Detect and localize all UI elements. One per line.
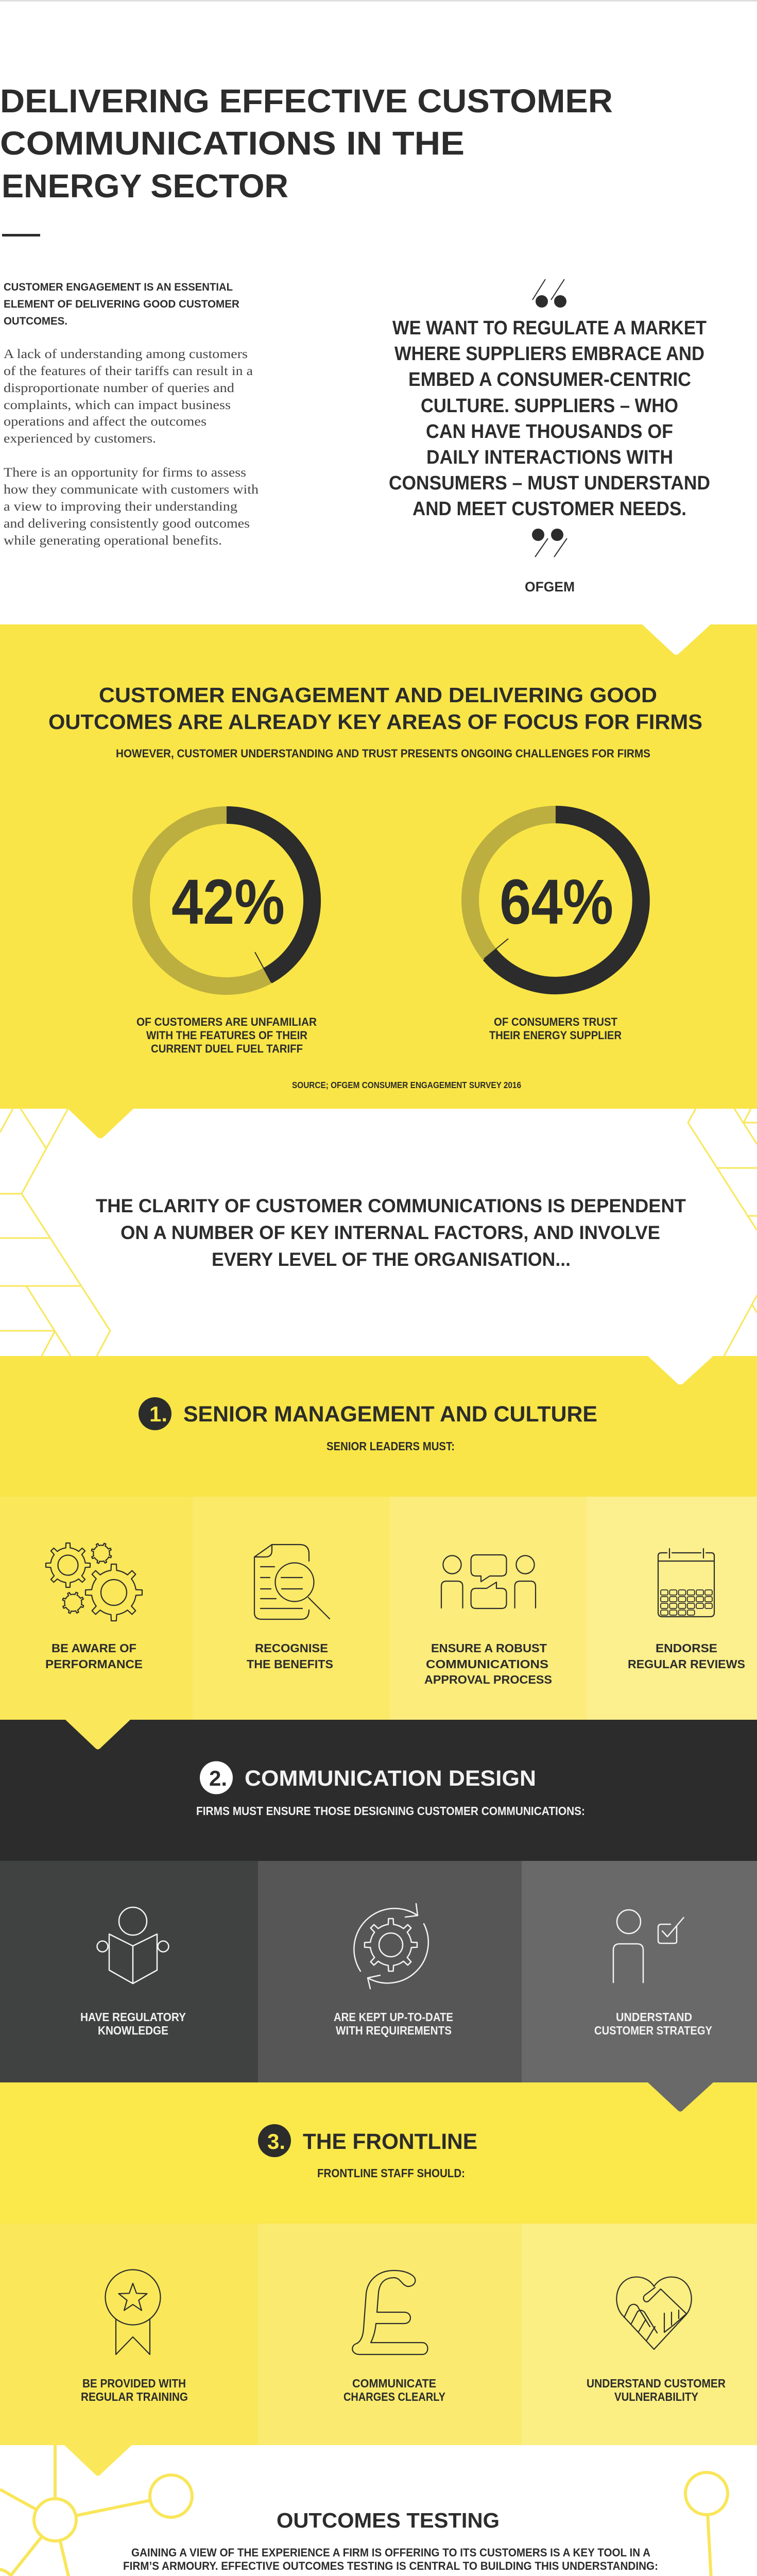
intro heading: CUSTOMER ENGAGEMENT IS AN ESSENTIAL [4,281,233,293]
tile label: RECOGNISE [255,1641,328,1655]
quote attribution: OFGEM [525,579,575,595]
tile label: ENDORSE [656,1641,717,1655]
section number badge: 3. [267,2129,285,2154]
intro paragraph one [4,347,253,446]
panel heading [48,683,702,734]
title: ENERGY SECTOR [2,167,288,205]
outcomes testing intro: GAINING A VIEW OF THE EXPERIENCE A FIRM IS OFFERING TO ITS CUSTOMERS IS A KEY TOOL IN A [131,2546,650,2559]
panel: key areas of focus [0,624,757,1139]
tile label [424,1641,552,1686]
icon: calendar [658,1549,714,1617]
tile label: UNDERSTAND CUSTOMER [587,2377,726,2390]
tile label: PERFORMANCE [45,1657,143,1671]
quote text: AND MEET CUSTOMER NEEDS. [412,498,686,520]
quote text: CONSUMERS – MUST UNDERSTAND [389,472,710,494]
intro paragraph one: complaints, which can impact business [4,398,231,412]
tile label [81,2377,188,2403]
section number badge [258,2124,291,2157]
section heading: COMMUNICATION DESIGN [245,1766,536,1791]
icon: gear with cycle arrows [354,1904,428,1989]
icon: medal [105,2270,161,2354]
intro paragraph one: experienced by customers. [4,432,156,446]
title [0,82,613,205]
icon: person reading a book [97,1907,169,1984]
intro heading: OUTCOMES. [4,315,67,327]
network background pattern [0,2445,757,2576]
intro paragraph two: how they communicate with customers with [4,483,259,497]
tile label: COMMUNICATIONS [426,1657,548,1671]
section subheading: SENIOR LEADERS MUST: [326,1439,455,1453]
caption: 64%: OF CONSUMERS TRUST [494,1015,618,1028]
panel: communication design [0,1720,757,1861]
section heading: SENIOR MANAGEMENT AND CULTURE [183,1402,597,1427]
tile: customer vulnerability [522,2224,757,2445]
quote text [389,317,710,520]
panel subheading: HOWEVER, CUSTOMER UNDERSTANDING AND TRUST PRESENTS ONGOING CHALLENGES FOR FIRMS [116,747,650,760]
icon: heart handshake [616,2277,692,2349]
caption: 64%: THEIR ENERGY SUPPLIER [489,1029,622,1042]
quote text: CAN HAVE THOUSANDS OF [426,421,673,443]
donut chart: 42% [141,815,312,986]
panel heading: OUTCOMES ARE ALREADY KEY AREAS OF FOCUS FOR FIRMS [48,710,702,734]
tile label: UNDERSTAND [616,2010,692,2024]
donut chart: 64% [470,815,641,986]
tile label: APPROVAL PROCESS [424,1673,552,1686]
intro paragraph two: while generating operational benefits. [4,534,222,548]
quote text: CULTURE. SUPPLIERS – WHO [421,395,678,417]
caption: 42%: WITH THE FEATURES OF THEIR [146,1029,307,1042]
tile: endorse regular reviews [587,1497,757,1720]
section number badge: 1. [149,1402,167,1426]
panel: the frontline [0,2082,757,2224]
tile: regular training [0,2224,258,2445]
tile label: CHARGES CLEARLY [343,2390,445,2403]
quote text: WE WANT TO REGULATE A MARKET [392,317,707,339]
section heading: THE FRONTLINE [303,2129,477,2154]
intro paragraph two: There is an opportunity for firms to assess [4,466,246,480]
tile label: CUSTOMER STRATEGY [594,2024,712,2037]
tile label: WITH REQUIREMENTS [336,2024,452,2037]
intro heading: ELEMENT OF DELIVERING GOOD CUSTOMER [4,298,239,310]
section subheading: FIRMS MUST ENSURE THOSE DESIGNING CUSTOMER COMMUNICATIONS: [196,1804,585,1818]
tile label [628,1641,745,1671]
icon: gears [46,1540,142,1621]
tile label: REGULAR TRAINING [81,2390,188,2403]
section number badge [139,1397,171,1430]
tile label: ENSURE A ROBUST [431,1641,547,1655]
title: COMMUNICATIONS IN THE [0,125,464,162]
tile: recognise the benefits [193,1497,390,1720]
tile label: KNOWLEDGE [98,2024,168,2037]
intro paragraph one: disproportionate number of queries and [4,381,235,395]
tile: be aware of performance [0,1497,193,1720]
tile label [45,1641,143,1671]
quote text: WHERE SUPPLIERS EMBRACE AND [394,343,704,365]
tile label: VULNERABILITY [614,2390,698,2403]
panel: senior management and culture [0,1356,757,1497]
tile: communicate charges clearly [258,2224,522,2445]
clarity heading: ON A NUMBER OF KEY INTERNAL FACTORS, AND INVOLVE [121,1222,660,1243]
tile label: BE PROVIDED WITH [82,2377,186,2390]
tile label: REGULAR REVIEWS [628,1657,745,1671]
donut chart: 42%: 42% [171,867,285,938]
section number badge [200,1761,233,1794]
tile label [594,2010,712,2037]
caption: 42% [136,1015,317,1055]
clarity heading [96,1195,686,1270]
tile label [587,2377,726,2403]
outcomes testing intro [123,2546,658,2572]
intro paragraph one: of the features of their tariffs can result in a [4,364,253,378]
intro paragraph one: operations and affect the outcomes [4,415,207,429]
icon: person with checkbox [613,1910,684,1982]
intro paragraph two [4,466,259,548]
pointer from frontline tile [64,2445,132,2476]
quote text: EMBED A CONSUMER-CENTRIC [408,369,691,391]
intro heading [4,281,239,327]
tile label [343,2377,445,2403]
panel heading: CUSTOMER ENGAGEMENT AND DELIVERING GOOD [99,683,657,707]
section subheading: FRONTLINE STAFF SHOULD: [317,2166,465,2180]
clarity heading: EVERY LEVEL OF THE ORGANISATION... [212,1248,571,1270]
tile label [334,2010,453,2037]
icon: opening quote mark [532,279,566,308]
clarity heading: THE CLARITY OF CUSTOMER COMMUNICATIONS IS DEPENDENT [96,1195,686,1216]
tile label: BE AWARE OF [51,1641,136,1655]
source note: SOURCE; OFGEM CONSUMER ENGAGEMENT SURVEY 2016 [292,1080,521,1090]
tile: robust approval process [390,1497,587,1720]
tile: kept up to date [258,1861,522,2082]
outcomes testing intro: FIRM’S ARMOURY. EFFECTIVE OUTCOMES TESTING IS CENTRAL TO BUILDING THIS UNDERSTANDING: [123,2560,658,2572]
tile label: THE BENEFITS [247,1657,333,1671]
caption: 64% [489,1015,622,1042]
intro paragraph two: a view to improving their understanding [4,500,238,514]
section number badge: 2. [209,1766,227,1790]
caption: 42%: OF CUSTOMERS ARE UNFAMILIAR [136,1015,317,1028]
quote text: DAILY INTERACTIONS WITH [426,447,673,468]
outcomes testing heading: OUTCOMES TESTING [277,2509,500,2532]
hexagon background pattern [0,1109,757,1356]
intro text block [4,281,259,548]
pointer from tile row [648,2082,713,2111]
intro paragraph one: A lack of understanding among customers [4,347,248,361]
icon: closing quote mark [532,529,567,557]
icon: document and magnifier [254,1545,330,1619]
tile label: ARE KEPT UP-TO-DATE [334,2010,453,2024]
quote [389,279,710,595]
icon: pound sign [352,2270,427,2354]
title: DELIVERING EFFECTIVE CUSTOMER [0,82,613,120]
icon: two people conversing [441,1555,536,1608]
pointer from tile row [65,1720,130,1750]
tile: regulatory knowledge [0,1861,258,2082]
tile label [80,2010,186,2037]
intro paragraph two: and delivering consistently good outcomes [4,517,250,531]
tile label: COMMUNICATE [352,2377,436,2390]
tile label [247,1641,333,1671]
caption: 42%: CURRENT DUEL FUEL TARIFF [151,1042,303,1055]
donut chart: 64%: 64% [500,867,613,938]
tile: understand customer strategy [522,1861,757,2082]
tile label: HAVE REGULATORY [80,2010,186,2024]
